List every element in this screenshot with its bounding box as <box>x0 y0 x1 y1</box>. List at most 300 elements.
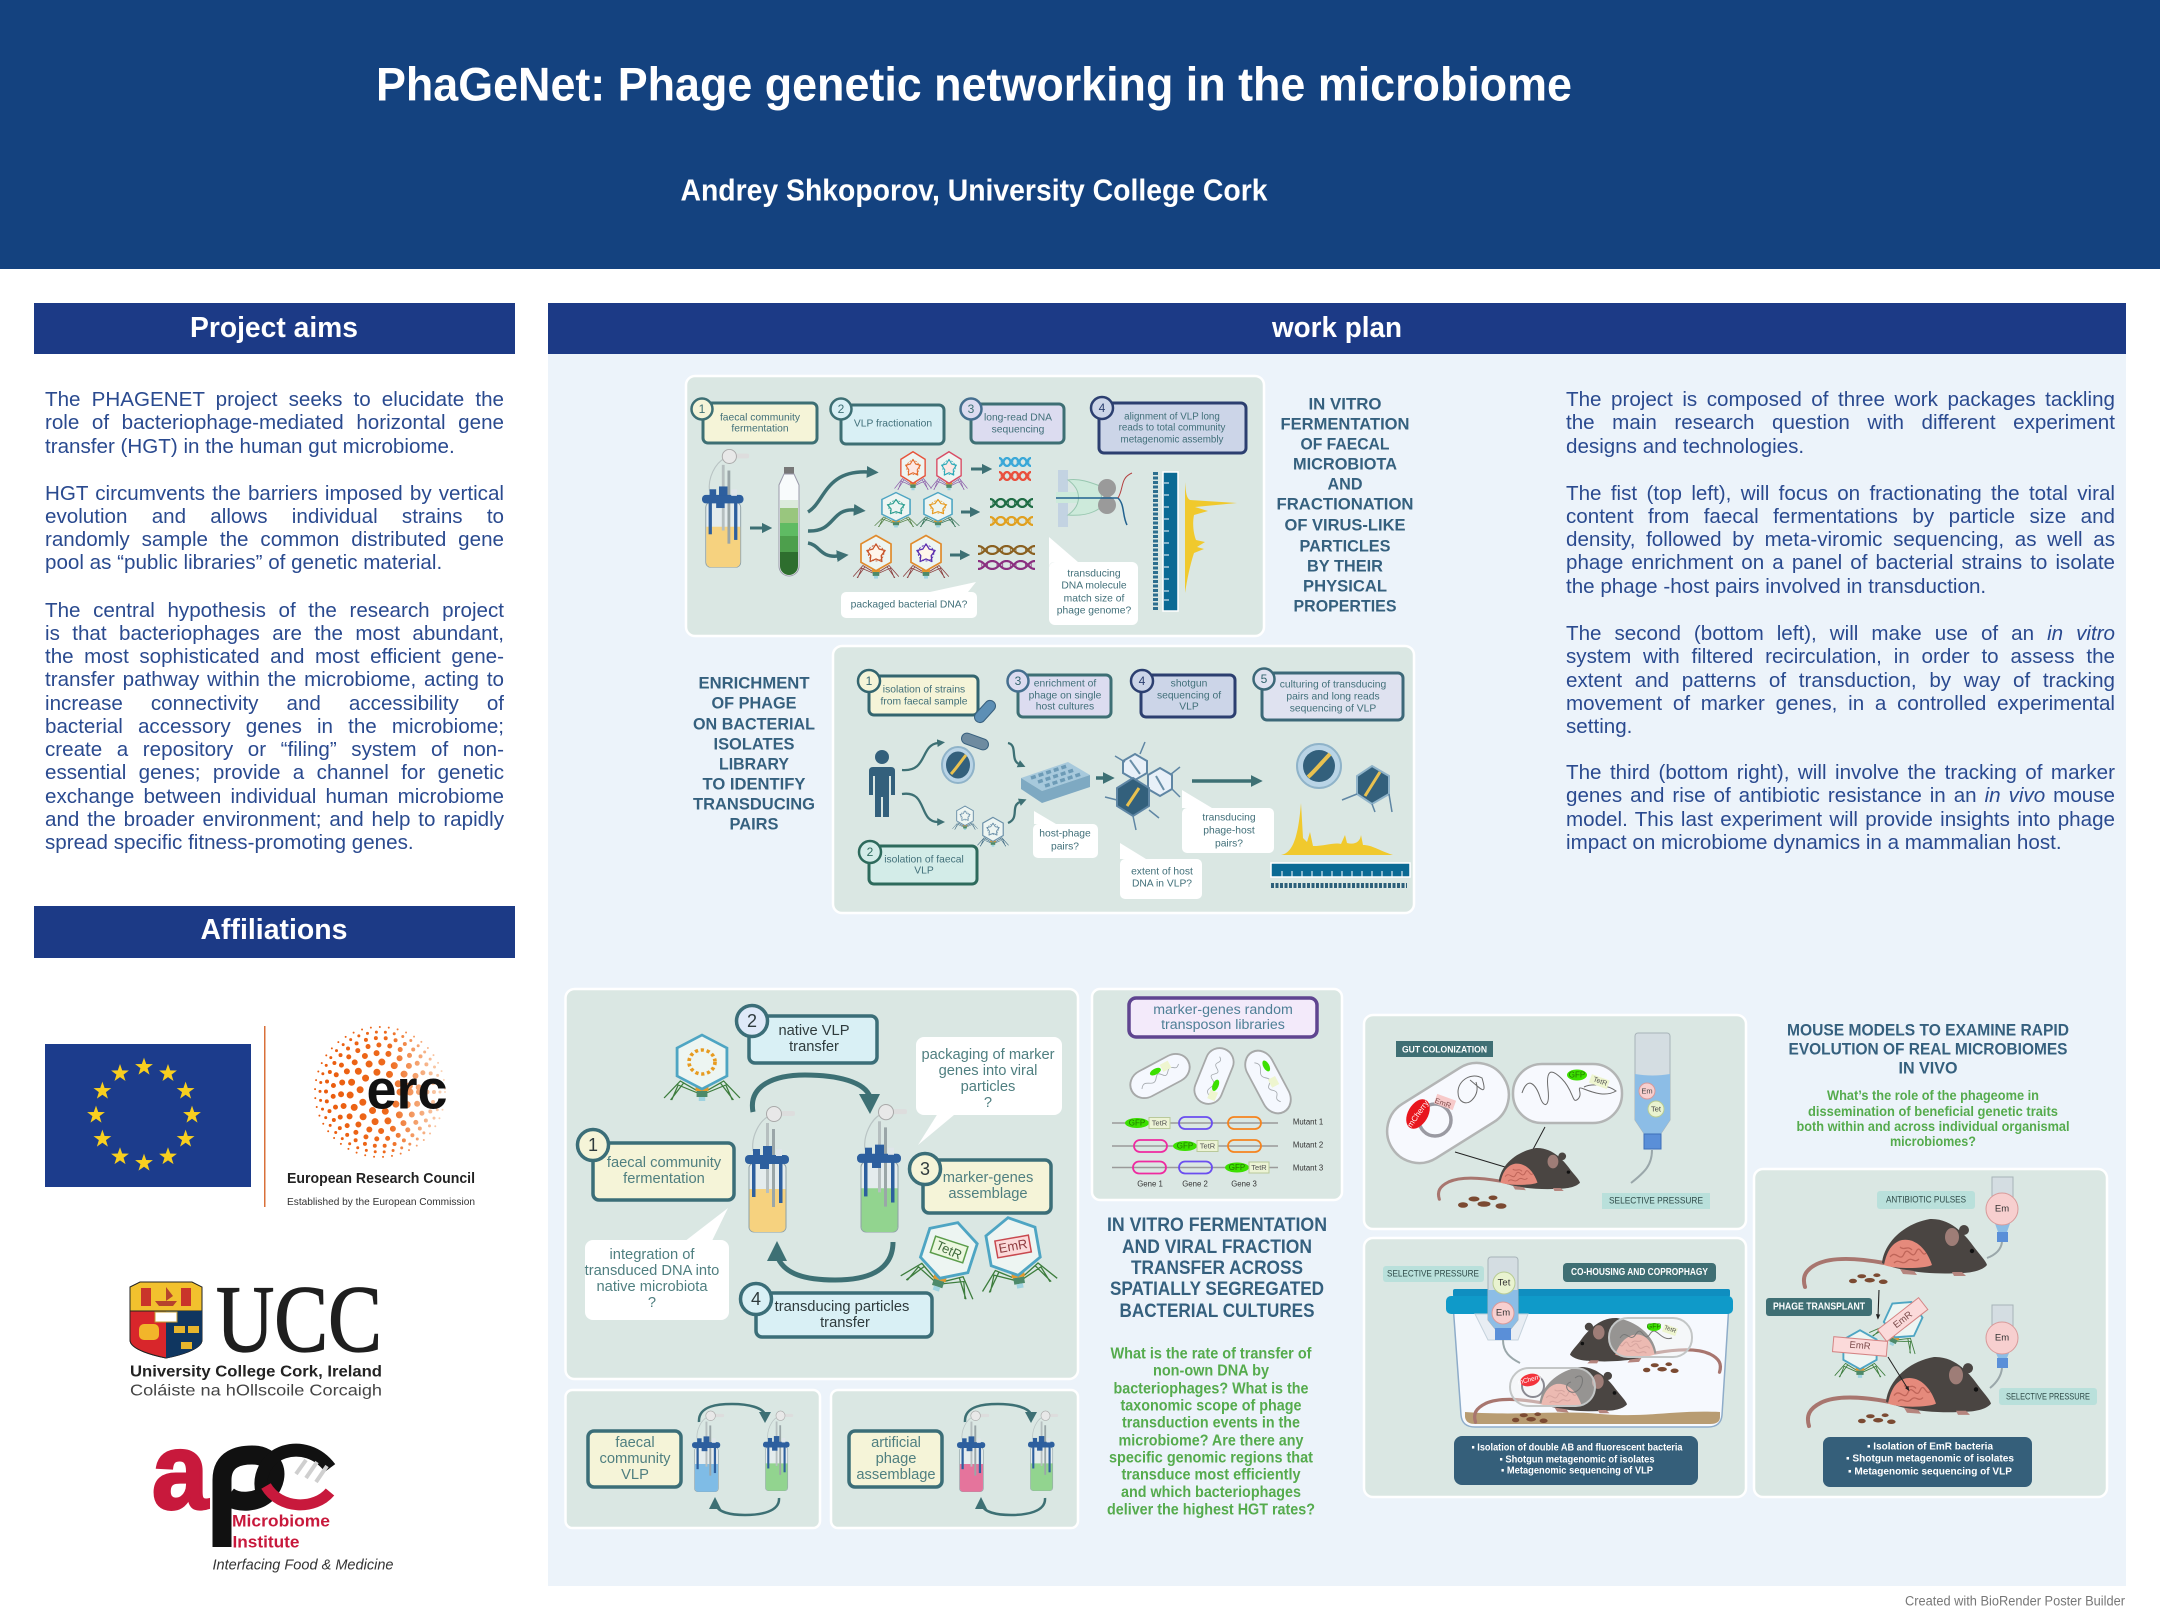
step 3 label: host cultures <box>1036 702 1094 712</box>
heading: in vitro fermentation and fractionation: OF VIRUS-LIKE <box>1284 516 1406 534</box>
step 1 label: isolation of strains <box>883 684 965 696</box>
text: third work package: The third (bottom right), will involve the tracking of marker <box>1566 761 2115 784</box>
heading: enrichment of phage: TO IDENTIFY <box>702 774 806 794</box>
icons: bacterial mutants <box>1125 1044 1296 1118</box>
box: analyses: ▪ Shotgun metagenomic of isolates <box>1846 1454 2014 1464</box>
callout: transducing molecule size: transducing <box>1067 568 1121 580</box>
step 3 label: 3 <box>1015 674 1022 688</box>
heading: in vitro fermentation and fractionation: PHYSICAL <box>1303 576 1387 596</box>
text: aims paragraph 3: is that bacteriophages are the most abundant, <box>45 622 504 645</box>
chart: gene insertion map: GFP <box>1177 1142 1193 1150</box>
icon: cage <box>1446 1289 1733 1427</box>
tag: selective pressure: SELECTIVE PRESSURE <box>1609 1196 1703 1206</box>
callout: packaging of marker genes: particles <box>961 1079 1015 1095</box>
panel: co-housing and coprophagy <box>1364 1238 1746 1497</box>
label: VLP <box>621 1467 649 1483</box>
research questions: in vitro: What is the rate of transfer of <box>1110 1346 1312 1362</box>
callout: host-phage pairs: host-phage <box>1039 828 1091 840</box>
icon: rod bacterium <box>972 698 998 725</box>
step 3 label: long-read DNA <box>984 412 1052 424</box>
step 4 label: reads to total community <box>1119 422 1225 434</box>
step 1 label: from faecal sample <box>880 696 968 708</box>
arrows <box>699 1404 779 1515</box>
tag: co-housing <box>1563 1263 1716 1282</box>
research questions: in vivo: both within and across individual organismal <box>1796 1118 2070 1134</box>
step 2 label: 2 <box>747 1011 757 1031</box>
text: aims paragraph 2: pool as “public libraries” of genetic material. <box>45 551 442 574</box>
heading: project aims <box>34 303 515 354</box>
step 3 label: enrichment of <box>1034 678 1096 690</box>
callout: transducing pairs: pairs? <box>1215 838 1243 850</box>
callout: integration into native microbiota: ? <box>648 1295 656 1311</box>
box: analyses <box>1454 1436 1698 1485</box>
logo: UCC: University College Cork, Ireland <box>130 1364 382 1380</box>
step 3 label: 3 <box>920 1159 930 1179</box>
arrow: native VLP transfer <box>752 1075 880 1114</box>
text: first work package: the phage -host pairs involved in transduction. <box>1566 575 1986 598</box>
step 4 label: VLP <box>1179 702 1199 712</box>
heading: work plan: work plan <box>1271 312 1402 344</box>
logo: ERC: erc <box>366 1058 448 1120</box>
text: aims paragraph 3: transfer pathway within the microbiome, acting to <box>45 668 504 691</box>
callout: host-phage pairs: pairs? <box>1051 842 1079 852</box>
text: first work package <box>1566 482 2115 598</box>
callout: packaging of marker genes: genes into viral <box>939 1063 1037 1079</box>
step 5 label <box>1254 668 1403 720</box>
step 1 label: 1 <box>588 1135 598 1155</box>
callout: packaging of marker genes: packaging of marker <box>921 1047 1055 1063</box>
step 2 label <box>736 1006 877 1063</box>
icon: water bottle lower <box>1986 1305 2018 1388</box>
tag: co-housing: CO-HOUSING AND COPROPHAGY <box>1571 1267 1708 1278</box>
authors: Andrey Shkoporov, University College Cork <box>680 172 1268 208</box>
text: first work package: The fist (top left), will focus on fractionating the total viral <box>1566 482 2115 505</box>
DNA fragments <box>978 458 1035 569</box>
step 4 label: 4 <box>1139 674 1146 688</box>
panel: enrichment workflow <box>833 646 1414 913</box>
heading: enrichment of phage: ISOLATES <box>714 734 794 754</box>
heading: enrichment of phage: ON BACTERIAL <box>693 714 815 734</box>
icon: pellets <box>1512 1362 1679 1423</box>
icon: EmR phage: EmR <box>997 1236 1029 1256</box>
icon: faecal VLPs <box>952 806 1009 847</box>
step 4 label <box>740 1284 932 1337</box>
icon: EmR phage upper: EmR <box>1891 1309 1915 1331</box>
logo: UCC <box>130 1266 382 1400</box>
heading: enrichment of phage <box>693 674 815 834</box>
research questions: in vitro: non-own DNA by <box>1153 1362 1269 1380</box>
logo: APC Microbiome Institute: Institute <box>232 1532 300 1552</box>
label: faecal <box>615 1435 655 1451</box>
logo: UCC: UCC <box>216 1266 382 1372</box>
label <box>849 1431 942 1487</box>
arrow to sequencing <box>1192 779 1252 783</box>
text: work packages overview: The project is composed of three work packages tackling <box>1566 388 2115 411</box>
small arrows <box>950 469 983 555</box>
icon: lower mouse with mCherry bacterium: mCherry <box>1517 1373 1544 1387</box>
research questions: in vitro: specific genomic regions that <box>1109 1450 1313 1466</box>
callout: transducing pairs: phage-host <box>1203 826 1255 836</box>
step 4 label: 4 <box>1099 401 1106 415</box>
heading: in vitro fermentation and fractionation: MICROBIOTA <box>1293 454 1397 474</box>
panel: VLP transfer between fermenters <box>566 989 1078 1379</box>
chart: gene insertion map: TetR <box>1200 1142 1216 1150</box>
icon: bioreactor recipient <box>857 1105 907 1232</box>
research questions: in vitro: transduce most efficiently <box>1122 1466 1301 1484</box>
callout: transducing molecule size: match size of <box>1064 594 1124 604</box>
tag: phage transplant: PHAGE TRANSPLANT <box>1773 1302 1866 1312</box>
text: aims paragraph 3: exchange between individual human microbiome <box>45 785 504 808</box>
heading: in vitro fermentation and fractionation: FRACTIONATION <box>1276 494 1414 514</box>
icon: mCherry EmR bacterium: mCherry <box>1406 1099 1430 1129</box>
chart: gene insertion map <box>1112 1117 1323 1188</box>
text: aims paragraph 2: evolution and allows individual strains to <box>45 505 504 528</box>
step 4 label <box>1091 397 1246 453</box>
heading: in vitro fermentation and fractionation: AND <box>1328 474 1362 494</box>
callout: integration into native microbiota: integration of <box>610 1247 695 1263</box>
step 1 label <box>858 670 978 715</box>
box: analyses: ▪ Metagenomic sequencing of VLP <box>1848 1466 2012 1478</box>
icon: water bottle <box>1631 1033 1670 1183</box>
chart: gene insertion map: Gene 3 <box>1231 1180 1257 1188</box>
step 2 label: native VLP <box>778 1023 850 1039</box>
tag: antibiotic pulses: ANTIBIOTIC PULSES <box>1886 1194 1966 1206</box>
arrows <box>965 1404 1045 1515</box>
arrows from person <box>902 743 1020 823</box>
text: aims paragraph 3: essential genes; provide a channel for genetic <box>45 761 504 784</box>
bioreactors <box>957 1411 1058 1492</box>
label <box>588 1431 681 1487</box>
icon: water bottle upper <box>1986 1177 2018 1258</box>
phage row 2 <box>875 493 959 527</box>
text: first work package: density, followed by meta-viromic sequencing, as well as <box>1566 528 2115 551</box>
icon: target cell <box>1297 744 1341 788</box>
panel: artificial phage assemblage control <box>831 1390 1078 1528</box>
callout: transducing molecule size: DNA molecule <box>1061 580 1127 592</box>
heading: in vitro fermentation and fractionation: OF FAECAL <box>1300 434 1390 454</box>
logo: APC Microbiome Institute: Interfacing Food & Medicine <box>212 1556 394 1574</box>
heading: spatially segregated transfer <box>1107 1214 1327 1322</box>
label: marker-genes random <box>1153 1002 1293 1018</box>
panel: in vitro fractionation workflow <box>686 376 1264 636</box>
logo: APC Microbiome Institute: Microbiome <box>232 1512 330 1530</box>
icon: cage water bottle <box>1488 1257 1520 1363</box>
panel: marker-gene transposon libraries <box>1092 989 1342 1200</box>
heading: affiliations <box>34 906 515 958</box>
text: third work package: model. This last experiment will provide insights into phage <box>1566 808 2115 830</box>
icon: upper mouse with GFP bacterium <box>1570 1318 1720 1372</box>
callout: transducing pairs: transducing <box>1202 812 1256 824</box>
research questions: in vitro: taxonomic scope of phage <box>1120 1398 1302 1414</box>
chart: read coverage peaks <box>1281 803 1393 855</box>
icon: water bottle: Em <box>1641 1086 1653 1096</box>
icon: recipient mouse <box>1808 1357 1991 1426</box>
step 4 label: transfer <box>820 1315 870 1331</box>
step 4 label: shotgun <box>1171 678 1208 690</box>
step 1 label <box>692 398 817 443</box>
heading: spatially segregated transfer: TRANSFER ACROSS <box>1131 1257 1303 1279</box>
text: aims paragraph 1: role of bacteriophage-mediated horizontal gene <box>45 411 504 434</box>
tag: antibiotic pulses <box>1877 1191 1975 1209</box>
heading: in vitro fermentation and fractionation: PARTICLES <box>1300 536 1390 556</box>
icon: nanopore sequencing <box>1056 470 1132 527</box>
box: analyses: ▪ Isolation of EmR bacteria <box>1867 1442 1993 1452</box>
heading: affiliations: Affiliations <box>200 914 348 946</box>
text: aims paragraph 1 <box>45 388 504 458</box>
label: artificial <box>871 1435 921 1451</box>
icon: pellets <box>1458 1196 1506 1209</box>
box: analyses: ▪ Isolation of double AB and fluorescent bacteria <box>1472 1442 1683 1454</box>
text: aims paragraph 3: create a repository or “filing” system of non- <box>45 738 504 761</box>
bioreactors <box>692 1411 793 1492</box>
text: aims paragraph 3: and the broader environment; and help to rapidly <box>45 808 504 831</box>
step 2 label <box>859 841 977 884</box>
icon: GFP TetR bacterium <box>1513 1064 1622 1123</box>
callout: transducing molecule size: phage genome? <box>1057 606 1131 616</box>
icon: density gradient tube <box>779 467 799 576</box>
box: analyses: ▪ Shotgun metagenomic of isolates <box>1500 1454 1655 1466</box>
icon: culture well plate <box>1021 762 1090 803</box>
icon: water bottle upper: Em <box>1995 1204 2009 1214</box>
icon: EmR phage lower <box>1832 1330 1888 1378</box>
box: analyses: ▪ Metagenomic sequencing of VLP <box>1501 1466 1653 1476</box>
text: second work package: The second (bottom left), will make use of an in vitro <box>1566 622 2115 645</box>
step 5 label: 5 <box>1261 672 1268 686</box>
chart: gene insertion map: Gene 2 <box>1182 1180 1208 1188</box>
callout: integration into native microbiota <box>585 1208 729 1320</box>
logo: UCC: Coláiste na hOllscoile Corcaigh <box>130 1382 382 1400</box>
label: assemblage <box>856 1467 936 1483</box>
tag: selective pressure: SELECTIVE PRESSURE <box>1387 1268 1479 1280</box>
text: first work package: phage enrichment on a panel of bacterial strains to isolate <box>1566 551 2115 574</box>
icon: bioreactor donor <box>745 1106 795 1232</box>
text: aims paragraph 3: the most sophisticated and most efficient gene- <box>45 645 504 668</box>
step 4 label: metagenomic assembly <box>1121 434 1224 446</box>
research questions: in vivo <box>1796 1087 2070 1149</box>
arrow to phage cluster <box>1096 776 1104 780</box>
tag: selective pressure <box>1602 1193 1710 1209</box>
research questions: in vitro: microbiome? Are there any <box>1118 1432 1304 1450</box>
box: analyses <box>1823 1437 2032 1487</box>
logo: APC Microbiome Institute: a <box>152 1410 209 1532</box>
icon: TetR phage <box>900 1211 994 1302</box>
label <box>1129 998 1317 1037</box>
gel ladder and peaks <box>1156 472 1237 611</box>
callout: transducing molecule size <box>1049 537 1138 625</box>
chart: gene insertion map: Mutant 1 <box>1293 1118 1323 1126</box>
heading: mouse models <box>1787 1020 2069 1078</box>
text: second work package: extent and patterns of transduction, by way of tracking <box>1566 668 2115 692</box>
arrow: transducing particle transfer <box>767 1241 893 1280</box>
text: second work package: setting. <box>1566 715 1632 738</box>
text: work packages overview: the main research question with different experiment <box>1566 411 2115 434</box>
callout: extent of host DNA <box>1120 843 1202 899</box>
icon: upper mouse with GFP bacterium: TetR <box>1663 1325 1677 1335</box>
heading: spatially segregated transfer: IN VITRO FERMENTATION <box>1107 1214 1327 1236</box>
step 2 label: 2 <box>867 845 874 859</box>
tag: gut colonization <box>1396 1041 1493 1057</box>
connector lines <box>1455 1127 1545 1170</box>
heading: mouse models: IN VIVO <box>1898 1058 1958 1078</box>
text: second work package <box>1566 622 2115 738</box>
step 2 label: transfer <box>789 1039 839 1055</box>
step 3 label: 3 <box>968 402 975 416</box>
icon: isolated bacterium <box>960 732 990 751</box>
tag: selective pressure <box>1383 1266 1484 1282</box>
research questions: in vitro: deliver the highest HGT rates? <box>1107 1502 1315 1518</box>
arrow: phage to gut <box>1888 1357 1908 1389</box>
text: first work package: content from faecal fermentations by particle size and <box>1566 505 2115 528</box>
text: aims paragraph 3: increase connectivity and accessibility of <box>45 692 504 715</box>
callout: packaged bacterial DNA <box>841 582 977 618</box>
text: aims paragraph 3: spread specific fitness-promoting genes. <box>45 831 414 854</box>
heading: enrichment of phage: LIBRARY <box>719 754 790 774</box>
step 4 label: 4 <box>751 1289 761 1309</box>
text: aims paragraph 1: transfer (HGT) in the human gut microbiome. <box>45 434 455 458</box>
heading: mouse models: MOUSE MODELS TO EXAMINE RAPID <box>1787 1020 2069 1040</box>
heading: enrichment of phage: TRANSDUCING <box>693 794 815 814</box>
heading: in vitro fermentation and fractionation: FERMENTATION <box>1280 414 1410 434</box>
text: third work package <box>1566 761 2115 854</box>
icon: cell with DNA <box>942 747 974 783</box>
research questions: in vitro: and which bacteriophages <box>1121 1484 1301 1501</box>
research questions: in vivo: What’s the role of the phageome in <box>1827 1087 2039 1103</box>
heading: in vitro fermentation and fractionation: IN VITRO <box>1308 394 1382 414</box>
icon: phage cluster <box>1105 742 1180 830</box>
step 5 label: sequencing of VLP <box>1290 704 1376 714</box>
heading: spatially segregated transfer: BACTERIAL CULTURES <box>1120 1300 1314 1322</box>
chart: gene insertion map: Gene 1 <box>1137 1180 1163 1188</box>
text: third work package: impact on microbiome dynamics in a mammalian host. <box>1566 831 2062 854</box>
heading: in vitro fermentation and fractionation: BY THEIR <box>1307 556 1383 576</box>
icon: GFP TetR bacterium: TetR <box>1592 1076 1608 1088</box>
chart: gene insertion map: TetR <box>1251 1163 1267 1172</box>
heading: enrichment of phage: OF PHAGE <box>712 694 796 712</box>
text: third work package: genes and rise of antibiotic resistance in an in vivo mouse <box>1566 784 2115 807</box>
phage row 3 <box>853 535 949 579</box>
chart: gene insertion map: Mutant 2 <box>1293 1140 1323 1150</box>
callout: integration into native microbiota: native microbiota <box>596 1279 708 1295</box>
icon: EmR phage lower: EmR <box>1849 1340 1871 1352</box>
research questions: in vitro: bacteriophages? What is the <box>1114 1380 1309 1398</box>
step 2 label: isolation of faecal <box>884 854 964 866</box>
work plan background <box>548 354 2126 1586</box>
icon: water bottle: Tet <box>1651 1104 1662 1114</box>
phage row 1 <box>895 452 967 490</box>
step 3 label <box>1008 670 1111 717</box>
arrow <box>750 526 763 530</box>
icon: person <box>869 750 895 817</box>
label: community <box>599 1451 671 1467</box>
logo: ERC <box>287 1027 475 1208</box>
step 4 label: transducing particles <box>775 1299 909 1315</box>
icon: bioreactor <box>702 449 749 567</box>
step 3 label: phage on single <box>1029 690 1102 702</box>
icon: EmR phage upper <box>1868 1291 1934 1356</box>
icon: mouse <box>1438 1148 1580 1199</box>
step 3 label <box>910 1154 1051 1213</box>
arrows to fractions <box>808 472 868 556</box>
callout: packaging of marker genes <box>916 1037 1062 1145</box>
chart: gene insertion map: GFP <box>1129 1118 1145 1128</box>
text: aims paragraph 3: The central hypothesis of the research project <box>45 599 504 622</box>
icon: target phage <box>1342 766 1392 812</box>
text: work packages overview <box>1566 388 2115 458</box>
callout: packaged bacterial DNA: packaged bacterial DNA? <box>851 600 968 610</box>
label: transposon libraries <box>1161 1017 1285 1033</box>
icon: water bottle lower: Em <box>1995 1332 2009 1344</box>
icon: upper mouse with GFP bacterium: GFP <box>1647 1324 1662 1330</box>
text: aims paragraph 2 <box>45 482 504 574</box>
icon: TetR phage: TetR <box>934 1238 964 1262</box>
step 3 label: marker-genes <box>943 1170 1033 1186</box>
heading: in vitro fermentation and fractionation: PROPERTIES <box>1294 596 1396 616</box>
heading: mouse models: EVOLUTION OF REAL MICROBIOMES <box>1788 1040 2068 1058</box>
text: aims paragraph 3: bacterial accessory genes in the microbiome; <box>45 715 504 738</box>
heading: enrichment of phage: ENRICHMENT <box>698 674 810 692</box>
sequencing ruler <box>1271 863 1410 886</box>
icon: EmR phage <box>971 1211 1058 1295</box>
step 2 label: 2 <box>838 402 845 416</box>
icon: GFP TetR bacterium: GFP <box>1569 1070 1585 1080</box>
step 2 label <box>830 398 944 444</box>
callout: integration into native microbiota: transduced DNA into <box>585 1263 719 1279</box>
step 2 label: VLP <box>914 866 934 876</box>
heading: project aims: Project aims <box>190 312 358 344</box>
callout: transducing pairs <box>1182 790 1274 853</box>
text: work packages overview: designs and technologies. <box>1566 434 1804 458</box>
icon: donor mouse <box>1804 1219 1987 1287</box>
step 5 label: culturing of transducing <box>1280 680 1387 690</box>
text: aims paragraph 2: HGT circumvents the barriers imposed by vertical <box>45 482 504 505</box>
header banner <box>0 0 2160 269</box>
step 1 label: fermentation <box>731 424 789 434</box>
step 1 label: 1 <box>866 674 873 688</box>
heading: work plan <box>548 303 2126 354</box>
footer credit: Created with BioRender Poster Builder <box>1905 1594 2125 1608</box>
research questions: in vitro <box>1107 1346 1315 1518</box>
step 1 label: faecal community <box>607 1155 722 1171</box>
chart: gene insertion map: TetR <box>1152 1118 1168 1128</box>
research questions: in vivo: microbiomes? <box>1890 1133 1976 1149</box>
arrow: transplant <box>1878 1290 1879 1317</box>
research questions: in vivo: dissemination of beneficial genetic traits <box>1808 1103 2058 1119</box>
title: PhaGeNet: Phage genetic networking in the microbiome <box>376 58 1572 110</box>
icon: pellets <box>1849 1273 1888 1284</box>
logo: ERC: European Research Council <box>287 1171 475 1187</box>
text: aims paragraph 1: The PHAGENET project seeks to elucidate the <box>45 388 504 411</box>
logo: ERC: Established by the European Commission <box>287 1196 475 1208</box>
heading: spatially segregated transfer: SPATIALLY SEGREGATED <box>1110 1278 1324 1300</box>
icon: pellets <box>1858 1413 1896 1424</box>
panel: faecal community VLP control <box>566 1390 820 1528</box>
panel: phage transplant mouse model <box>1754 1169 2107 1497</box>
callout: extent of host DNA: extent of host <box>1131 866 1193 878</box>
step 5 label: pairs and long reads <box>1286 692 1380 702</box>
icon: cage water bottle: Tet <box>1498 1278 1511 1288</box>
logo: APC Microbiome Institute <box>152 1410 394 1574</box>
chart: gene insertion map: Mutant 3 <box>1293 1164 1323 1172</box>
step 1 label: 1 <box>699 402 706 416</box>
heading: in vitro fermentation and fractionation <box>1276 394 1414 616</box>
panel: gut colonization <box>1364 1015 1746 1229</box>
step 3 label: sequencing <box>992 424 1045 436</box>
heading: enrichment of phage: PAIRS <box>730 814 778 834</box>
step 3 label <box>960 398 1064 443</box>
text: aims paragraph 3 <box>45 599 504 854</box>
tag: selective pressure <box>1999 1388 2097 1405</box>
logo: EU flag <box>45 1044 251 1187</box>
